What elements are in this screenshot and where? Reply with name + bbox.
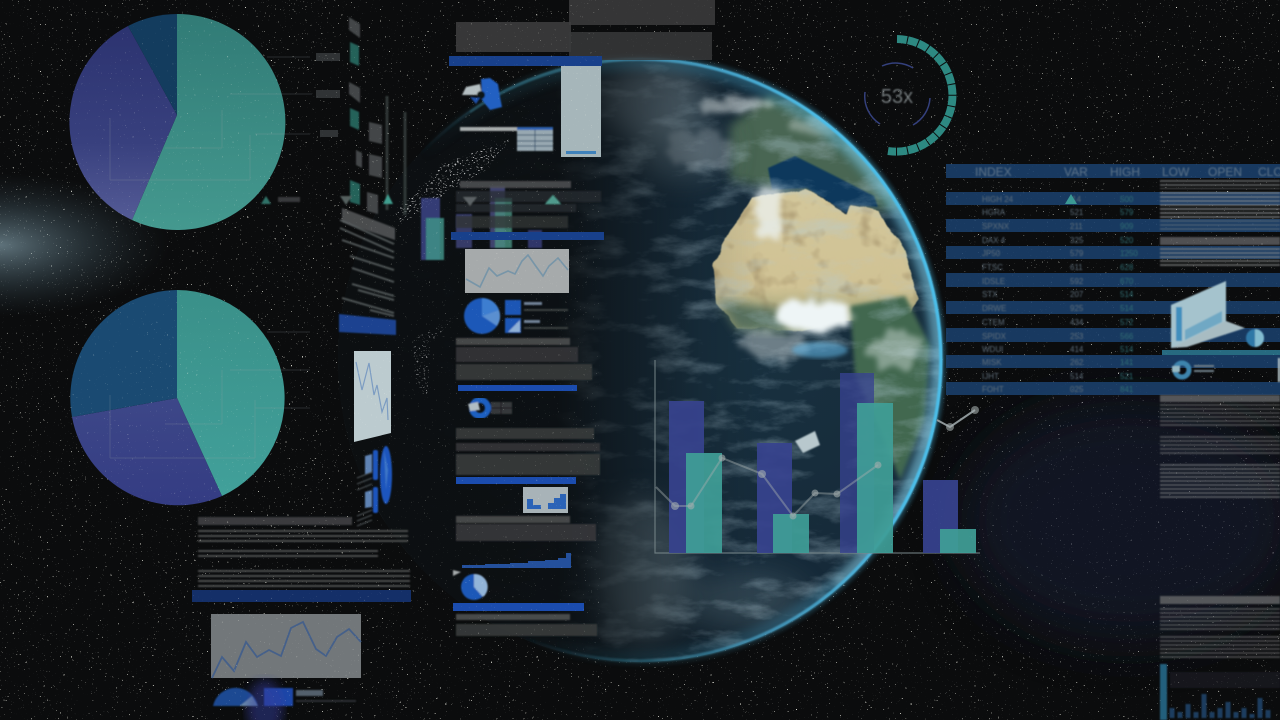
- isometric laptop icon: [1171, 281, 1245, 348]
- pie chart: lower: [70, 290, 310, 505]
- data table: [946, 164, 1280, 395]
- light flare at left edge: [0, 173, 170, 317]
- cloud: bright equatorial masses: [666, 98, 919, 370]
- center column: tall light card: [561, 66, 601, 157]
- table high column: 514: [1120, 304, 1134, 313]
- arrow markers: [261, 196, 271, 204]
- table high column: [1120, 195, 1138, 394]
- land: africa: [713, 188, 918, 330]
- teal divider bar: [1162, 350, 1280, 355]
- center column: grey text rows: [456, 181, 601, 228]
- table header: [975, 165, 1280, 179]
- ocean light patch: [792, 342, 848, 358]
- table var column: 514: [1070, 372, 1084, 381]
- bars: series teal: [686, 403, 976, 553]
- blue footer band: [339, 314, 396, 335]
- teal arc: [888, 39, 952, 152]
- table var column: 579: [1070, 249, 1084, 258]
- table high column: 141: [1120, 358, 1134, 367]
- table var column: 207: [1070, 290, 1084, 299]
- table first column: FTSC: [982, 263, 1003, 272]
- limb bright cloud band: [836, 140, 939, 586]
- slice: navy: [128, 14, 177, 115]
- small laptop icon: [795, 431, 820, 453]
- slice: navy: [70, 290, 177, 417]
- table high column: 500: [1120, 195, 1134, 204]
- right text panel: upper: [1160, 180, 1280, 268]
- percent value: 53x: [881, 86, 913, 108]
- table first column: MISK: [982, 358, 1002, 367]
- bar chart: [655, 360, 980, 553]
- table var column: 025: [1070, 385, 1084, 394]
- table var column: 521: [1070, 208, 1084, 217]
- bars: series purple: [669, 373, 958, 553]
- outer glow: [337, 57, 943, 663]
- center column: line chart card: [465, 249, 569, 293]
- table first column: DAX 4: [982, 236, 1006, 245]
- table var column: 14: [1072, 195, 1081, 204]
- center column: second blue bar: [451, 232, 604, 240]
- faint row labels: [278, 197, 300, 202]
- center column: grey block bottom: [456, 516, 596, 541]
- table var column: 262: [1070, 358, 1084, 367]
- trend line: [656, 406, 979, 520]
- table header: LOW: [1162, 165, 1190, 179]
- table high column: 841: [1120, 385, 1134, 394]
- lower left blue bar: [192, 590, 411, 602]
- cloud layer: [338, 58, 942, 662]
- limb atmospheric haze: [469, 60, 940, 662]
- skewed tiles: [349, 17, 382, 214]
- table var column: 253: [1070, 332, 1084, 341]
- center column: third blue bar: [458, 385, 577, 391]
- foreground stars: [0, 0, 600, 720]
- center column: mini bar card: [523, 487, 568, 513]
- night side shade: [338, 60, 742, 662]
- table var column: 211: [1070, 222, 1083, 231]
- bottom right chart: [1160, 664, 1280, 720]
- right text panel: middle: [1160, 395, 1280, 500]
- table high column: 521: [1120, 372, 1134, 381]
- table first column: IDSLE: [982, 277, 1005, 286]
- small pie icon: [1246, 329, 1264, 347]
- table header: HIGH: [1110, 165, 1140, 179]
- table first column: IJHT: [982, 372, 999, 381]
- up arrow: [1065, 194, 1077, 204]
- table var column: 925: [1070, 304, 1084, 313]
- table high column: 572: [1120, 318, 1134, 327]
- table var column: 325: [1070, 236, 1084, 245]
- center column: top grey block: [456, 0, 715, 60]
- center column: donut icon: [462, 78, 502, 110]
- center column: mini bar strip: [462, 553, 571, 568]
- tilted line chart card: [354, 351, 391, 442]
- city lights: north america: [392, 138, 512, 224]
- faint bracket lines: [110, 332, 310, 458]
- table first column: CTEM: [982, 318, 1005, 327]
- donut icon: right panel: [1172, 358, 1280, 382]
- city lights: south america: [412, 316, 455, 400]
- table high column: 579: [1120, 208, 1134, 217]
- land: europe and eastern mediterranean: [730, 95, 915, 212]
- center column: fifth blue bar: [453, 603, 584, 611]
- center column: blue header bar: [449, 56, 602, 66]
- table header: VAR: [1064, 165, 1088, 179]
- faint bracket lines: [110, 57, 312, 180]
- table stripes: [946, 164, 1280, 395]
- earth globe: [337, 57, 943, 663]
- table first column: SPIDX: [982, 332, 1007, 341]
- land: west africa greenery: [718, 300, 790, 335]
- lower left line chart card: [211, 614, 361, 678]
- upper limb arc: [470, 60, 605, 112]
- lower left half pie and legend: [213, 680, 356, 720]
- table var column: [1070, 195, 1084, 394]
- left perspective column: [261, 17, 405, 335]
- table var column: 434: [1070, 318, 1084, 327]
- pie chart: upper: [69, 14, 340, 230]
- cloud: high atmosphere grey: [592, 62, 805, 642]
- center column: footer grey rows: [456, 614, 597, 636]
- header band: [342, 208, 395, 240]
- table high column: 514: [1120, 290, 1134, 299]
- center column: blue pie and legends: [464, 298, 568, 334]
- center column: small table: [460, 127, 553, 151]
- vertical rules: [387, 96, 405, 215]
- table var column: 592: [1070, 277, 1084, 286]
- purple inner arcs: [865, 63, 930, 125]
- slice: purple: [69, 26, 177, 220]
- table first column: DRWE: [982, 304, 1006, 313]
- teal tiles: [350, 42, 360, 205]
- progress gauge: [865, 39, 952, 152]
- center column: bottom pie: [453, 570, 488, 600]
- lower left text panel: [198, 517, 410, 587]
- faint side labels: [316, 53, 340, 137]
- overlaid bar fragments: [421, 186, 542, 260]
- table first column: HIGH 24: [982, 195, 1014, 204]
- table high column: 628: [1120, 263, 1134, 272]
- table high column: 1250: [1120, 249, 1138, 258]
- ocean: mediterranean: [768, 156, 878, 213]
- table high column: 514: [1120, 345, 1134, 354]
- perspective text lines: [340, 220, 394, 316]
- table header: OPEN: [1208, 165, 1242, 179]
- center column: grey block: [456, 338, 592, 380]
- table first column: SPXNX: [982, 222, 1010, 231]
- center column: fourth blue bar: [456, 477, 576, 484]
- table high column: 566: [1120, 332, 1134, 341]
- table high column: 670: [1120, 277, 1134, 286]
- table first column: [982, 195, 1014, 394]
- slice: purple: [72, 398, 222, 505]
- table first column: WDUI: [982, 345, 1003, 354]
- table high column: 909: [1120, 222, 1134, 231]
- table high column: 520: [1120, 236, 1134, 245]
- table header: INDEX: [975, 165, 1012, 179]
- table first column: JP50: [982, 249, 1001, 258]
- slice: teal: [132, 14, 285, 230]
- axes: [655, 360, 980, 553]
- right text panel: lower: [1160, 596, 1280, 660]
- slice: teal: [177, 290, 285, 496]
- table var column: 414: [1070, 345, 1084, 354]
- table var column: 611: [1070, 263, 1083, 272]
- atmospheric rim: [339, 59, 941, 661]
- tilted blue pie charts: [357, 446, 392, 526]
- center column: grey block lower: [456, 428, 600, 475]
- table first column: FOHT: [982, 385, 1004, 394]
- center column: small donut icon: [468, 400, 512, 416]
- land: central africa greenery: [850, 296, 930, 480]
- table first column: STX: [982, 290, 998, 299]
- table first column: HGRA: [982, 208, 1006, 217]
